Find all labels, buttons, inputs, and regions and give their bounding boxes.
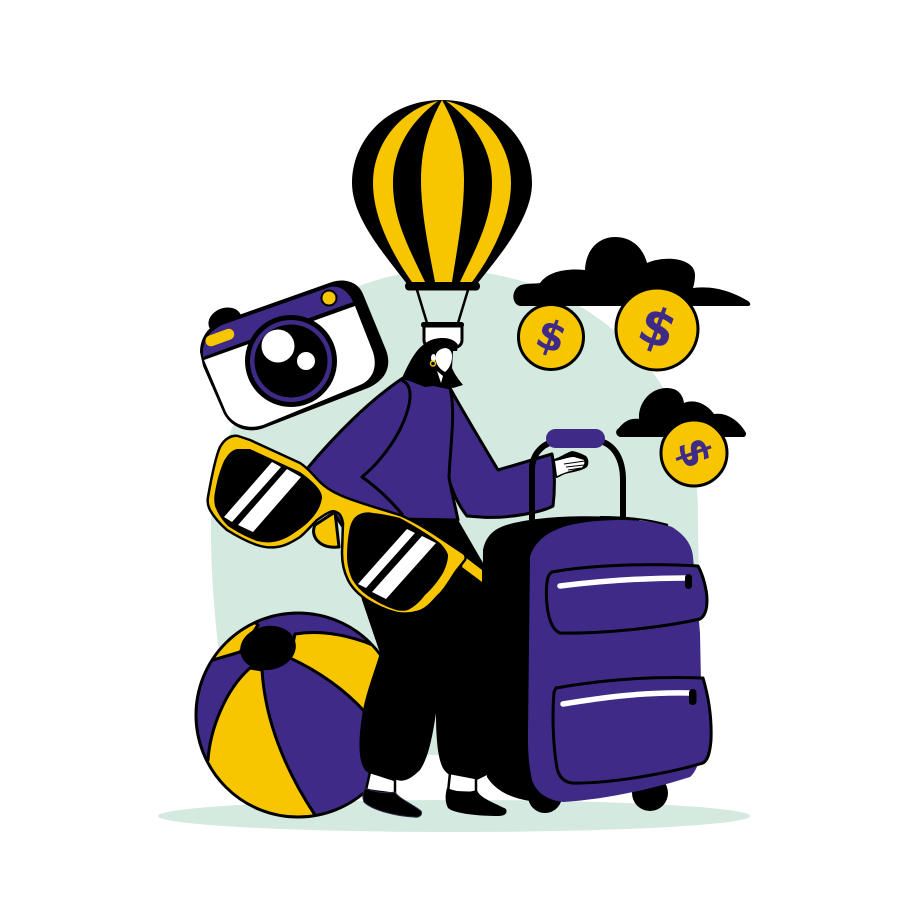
left lens	[214, 449, 322, 542]
frame	[208, 436, 466, 614]
large cloud	[513, 237, 750, 306]
coin: small dollar	[518, 304, 584, 370]
right lens	[347, 512, 448, 611]
camera front	[204, 306, 375, 427]
right lens reflections	[358, 529, 436, 599]
right arm sleeve	[448, 388, 554, 517]
coin: rotated dollar: $	[668, 431, 722, 474]
camera	[200, 280, 388, 430]
basket rim	[421, 322, 464, 328]
arm fold line	[362, 381, 410, 514]
ball outline	[196, 613, 400, 817]
background: mint blob	[211, 270, 700, 755]
ear	[431, 354, 436, 362]
right shoe	[446, 788, 507, 816]
temple arm	[462, 557, 482, 582]
torso and left arm	[306, 378, 458, 530]
ball cap	[237, 621, 299, 675]
telescopic handle	[532, 441, 623, 520]
hand behind bridge	[314, 512, 339, 547]
lens highlights	[262, 330, 294, 362]
hair	[402, 338, 463, 388]
ball panels	[206, 622, 380, 816]
suitcase	[482, 429, 711, 813]
beach ball	[194, 612, 380, 818]
case side	[482, 516, 640, 802]
front wheel	[632, 775, 668, 811]
camera shutter bump	[205, 303, 245, 339]
balloon envelope	[352, 100, 532, 284]
earring	[430, 361, 436, 366]
coin: large dollar: $	[630, 295, 684, 362]
lower zip pull	[689, 689, 696, 705]
coin: large dollar	[616, 288, 698, 370]
lower zip	[563, 693, 690, 704]
balloon basket	[424, 326, 462, 348]
small cloud	[616, 388, 746, 437]
camera flash	[204, 327, 236, 348]
balloon ropes	[417, 290, 468, 323]
camera top plate	[203, 287, 353, 357]
small cloud with coin	[616, 388, 746, 486]
hot air balloon	[352, 100, 532, 348]
traveller figure	[306, 338, 588, 817]
ball base	[196, 613, 400, 817]
hand	[553, 451, 588, 478]
camera button	[322, 290, 336, 306]
rear wheel	[528, 779, 562, 813]
ground shadow	[158, 800, 750, 832]
neck	[437, 371, 443, 383]
balloon stripes	[373, 100, 511, 282]
trousers	[345, 515, 520, 797]
face	[436, 348, 452, 372]
large cloud with coins	[513, 237, 750, 370]
upper zip pull	[685, 574, 692, 589]
balloon band	[405, 282, 480, 290]
case front	[528, 520, 702, 802]
socks	[366, 772, 476, 794]
upper zip	[560, 578, 686, 586]
case top edge	[600, 517, 668, 525]
coin: small dollar: $	[530, 309, 573, 363]
upper pocket	[546, 565, 707, 633]
sunglasses	[208, 436, 482, 614]
left shoe	[363, 788, 422, 817]
camera body outline	[200, 280, 388, 430]
camera lens	[245, 315, 337, 407]
lower pocket	[553, 677, 711, 783]
left lens reflections	[224, 462, 301, 532]
handle grip	[546, 429, 605, 448]
